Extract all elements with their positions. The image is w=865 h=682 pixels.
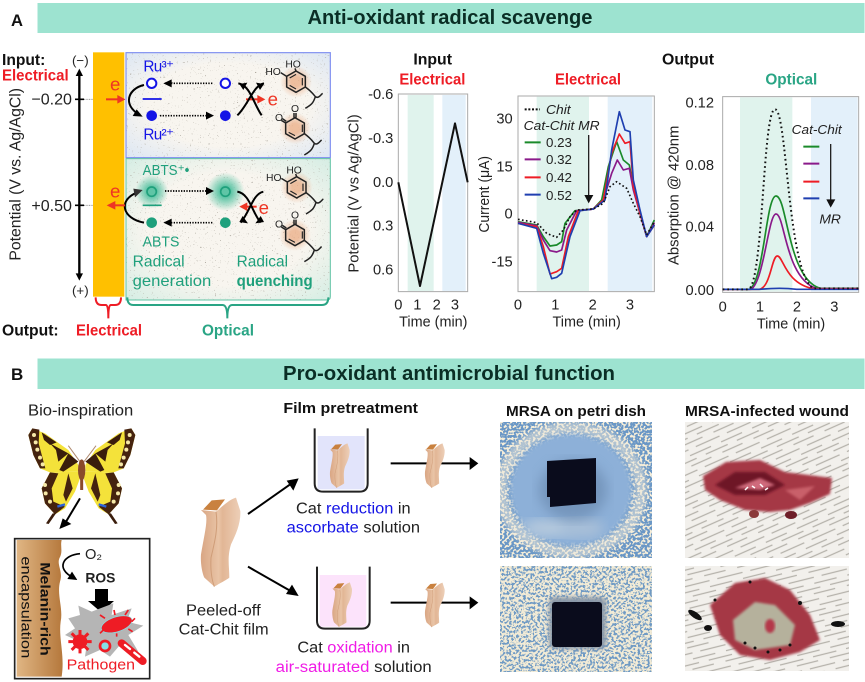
- legend: Chit: [546, 102, 572, 117]
- line chart: input potential: 1: [413, 297, 421, 313]
- line chart: output current: 1: [551, 297, 559, 313]
- Ru labels: [143, 58, 174, 143]
- input label: Input:: [2, 52, 45, 69]
- line chart: output current: 3: [626, 297, 634, 313]
- line chart: input potential: 2: [433, 297, 441, 313]
- green redox panel: [107, 159, 330, 300]
- molecule catechol: HO: [266, 173, 281, 184]
- line chart: output current: Current (μA): [477, 156, 493, 233]
- line chart: optical absorption: 0.00: [685, 283, 714, 299]
- line chart: input potential: 0.6: [373, 263, 393, 279]
- molecule catechol: HO: [285, 59, 301, 70]
- line chart: output current: 2: [589, 297, 597, 313]
- electron labels: [107, 181, 269, 218]
- line chart: input potential: Time (min): [399, 315, 467, 331]
- photo: petri dish reduced film: [500, 422, 652, 558]
- molecule quinone: O: [291, 211, 299, 222]
- ABTS circles: [143, 187, 231, 228]
- potential axis: (−): [72, 53, 89, 68]
- output braces: [96, 297, 328, 318]
- right wings: [84, 428, 135, 524]
- electron labels: e: [110, 74, 120, 95]
- line chart: output current: 15: [496, 160, 513, 176]
- electrode bar: [93, 52, 124, 297]
- heading banner A: Anti-oxidant radical scavenge: [308, 7, 592, 29]
- oxidation caption: air-saturated solution: [276, 659, 432, 676]
- arrow: [65, 498, 80, 523]
- line chart: output current: 0: [505, 206, 513, 222]
- legend: 0.23: [546, 135, 572, 150]
- dotted arrows: [165, 191, 212, 223]
- molecule quinone: O: [291, 104, 299, 115]
- line chart: output current: 30: [496, 112, 513, 128]
- line chart: optical absorption: 1: [756, 299, 764, 315]
- line chart: optical absorption: 0.08: [685, 158, 714, 174]
- green labels: quenching: [237, 273, 313, 290]
- oxygen to ROS: ROS: [85, 569, 115, 585]
- legend: Cat-Chit: [792, 122, 843, 137]
- green labels: generation: [133, 273, 211, 290]
- legend: 0.52: [546, 188, 572, 203]
- beaker: oxidation: [317, 567, 370, 629]
- peeled film: [179, 498, 269, 638]
- peeled film: Peeled-off: [186, 603, 261, 620]
- green labels: Radical: [237, 254, 288, 271]
- panel: electrochemical schematic: [2, 52, 330, 339]
- input label: [2, 52, 69, 85]
- line chart: input potential: 0.0: [373, 175, 393, 191]
- panel label A: A: [11, 11, 23, 30]
- crossing arrows: [237, 83, 264, 115]
- green labels: ABTS⁺•: [143, 163, 189, 179]
- legend: [524, 102, 600, 203]
- blue redox panel: [106, 53, 330, 158]
- panel: bio-inspiration: [15, 402, 269, 679]
- line chart: output current: 0: [514, 297, 522, 313]
- heading: Bio-inspiration: [28, 402, 133, 419]
- electron labels: e: [268, 89, 278, 110]
- green labels: Radical: [133, 254, 185, 271]
- chart headings: Electrical: [399, 72, 465, 89]
- line chart: input potential: -0.3: [368, 131, 393, 147]
- molecule quinone: O: [275, 113, 283, 124]
- molecule catechol: [266, 165, 323, 214]
- line chart: input potential: 0.3: [373, 219, 393, 235]
- photo: petri dish oxidized film: [500, 566, 652, 672]
- oxidation caption: Cat oxidation in: [297, 640, 410, 657]
- photo: wound oxidized film: [685, 566, 849, 671]
- molecule catechol: [265, 59, 323, 108]
- legend: MR: [819, 211, 841, 226]
- panel: film pretreatment: [248, 400, 478, 676]
- line chart: optical absorption: 0: [719, 299, 727, 315]
- melanin box: Melanin-rich: [38, 562, 54, 656]
- Ru circles: [143, 79, 231, 121]
- branching arrows: [248, 483, 292, 592]
- potential axis: [8, 53, 125, 298]
- heading: petri dish: MRSA on petri dish: [506, 403, 646, 420]
- oxidation caption: [276, 640, 432, 676]
- chart headings: Input: [413, 52, 453, 69]
- green labels: [133, 163, 313, 290]
- beaker: reduction: [315, 428, 368, 492]
- molecule catechol: HO: [265, 67, 281, 78]
- heading banner B: Pro-oxidant antimicrobial function: [283, 363, 615, 385]
- pathogen burst: [65, 603, 143, 657]
- heading: wound: MRSA-infected wound: [685, 403, 849, 420]
- chart headings: [399, 52, 817, 89]
- line chart: output current: Time (min): [552, 315, 621, 331]
- electron labels: e: [110, 181, 120, 202]
- peeled film: Cat-Chit film: [179, 621, 269, 638]
- chart headings: Output: [662, 52, 715, 69]
- output labels: Electrical: [76, 322, 142, 339]
- heading: Film pretreatment: [283, 400, 418, 417]
- curved arrow: [125, 193, 144, 223]
- reduction caption: Cat reduction in: [296, 500, 411, 517]
- Ru labels: Ru³⁺: [143, 58, 174, 75]
- panel label B: B: [11, 365, 23, 384]
- line chart: optical absorption: Time (min): [757, 317, 825, 333]
- melanin box: Pathogen: [67, 658, 135, 674]
- line chart: output current: [477, 96, 654, 331]
- Ru labels: Ru²⁺: [143, 126, 174, 143]
- line chart: optical absorption: Absorption @ 420nm: [667, 126, 683, 265]
- line chart: optical absorption: 3: [830, 299, 838, 315]
- potential axis: +0.50: [31, 198, 72, 215]
- reduction caption: [287, 500, 420, 537]
- legend: 0.32: [546, 152, 572, 167]
- molecule quinone: O: [275, 220, 283, 231]
- line chart: optical absorption: 2: [793, 299, 801, 315]
- potential axis: −0.20: [31, 92, 72, 109]
- reduction caption: ascorbate solution: [287, 520, 420, 537]
- legend: 0.42: [546, 170, 572, 185]
- molecule quinone: [275, 211, 322, 262]
- line chart: input potential: 0: [394, 297, 402, 313]
- output labels: Output:: [2, 322, 59, 339]
- legend: [792, 122, 843, 226]
- crossing arrows: [237, 192, 263, 223]
- curved electron arrow: [129, 85, 144, 115]
- line chart: output current: -15: [491, 255, 513, 271]
- treated film arrow: [391, 443, 478, 488]
- line chart: optical absorption: [667, 95, 859, 333]
- heading banner B: [38, 358, 864, 389]
- line chart: optical absorption: 0.12: [685, 95, 714, 111]
- potential axis: (+): [72, 283, 89, 298]
- heading banner A: [38, 3, 864, 33]
- chart headings: Electrical: [555, 72, 621, 89]
- melanin box: encapsulation: [19, 556, 35, 658]
- left wings: [28, 428, 80, 524]
- line chart: input potential: -0.6: [368, 87, 393, 103]
- potential axis: Potential (V vs. Ag/AgCl): [8, 88, 25, 261]
- output labels: Optical: [202, 322, 254, 339]
- output labels: [2, 322, 254, 339]
- icon: butterfly: [28, 428, 135, 524]
- legend: Cat-Chit MR: [524, 118, 600, 133]
- bacteria icons: [68, 610, 143, 661]
- line chart: input potential: 3: [451, 297, 459, 313]
- panel: charts: [346, 52, 859, 333]
- line chart: optical absorption: 0.04: [685, 220, 714, 236]
- molecule quinone: [275, 104, 322, 155]
- line chart: input potential: Potential (V vs Ag/AgCl): [346, 114, 362, 273]
- green labels: ABTS: [143, 235, 180, 251]
- photo: wound reduced film: [685, 422, 849, 558]
- molecule catechol: HO: [286, 165, 302, 176]
- input label: Electrical: [2, 68, 69, 85]
- electron labels: [106, 74, 278, 110]
- line chart: input potential: [346, 87, 468, 331]
- melanin box: [15, 539, 150, 679]
- chart headings: Optical: [765, 72, 817, 89]
- ABTS radical glow: [135, 175, 168, 208]
- treated film arrow: [391, 583, 478, 627]
- oxygen to ROS: [63, 547, 115, 612]
- oxygen to ROS: O₂: [85, 547, 102, 563]
- electron labels: e: [259, 197, 269, 218]
- dotted arrows: [160, 83, 212, 116]
